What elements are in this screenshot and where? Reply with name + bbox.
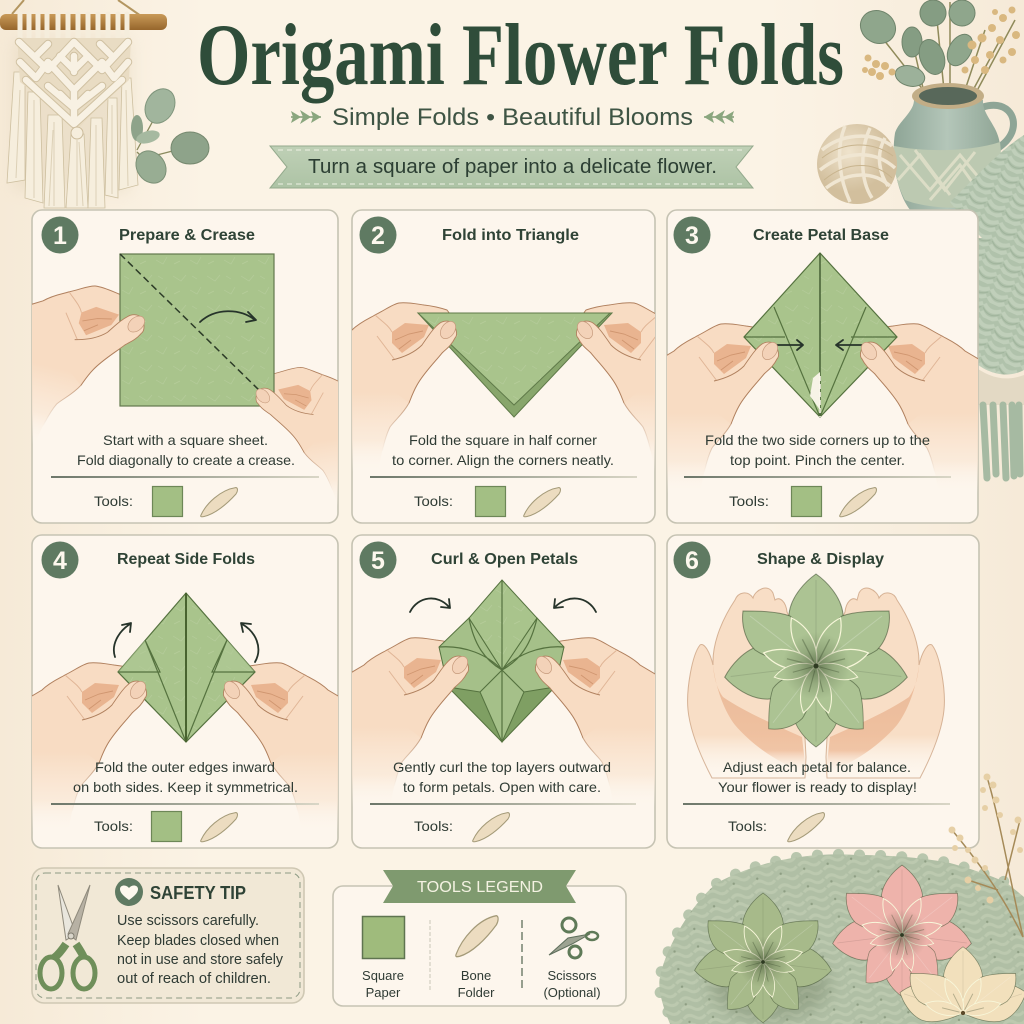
legend: bone folder: Bone <box>461 968 491 983</box>
description <box>705 432 930 468</box>
step number 6: 6 <box>685 547 699 575</box>
legend: square paper: Square <box>362 968 404 983</box>
illustration: curled petals, hands and arrows <box>352 579 655 801</box>
description <box>77 432 295 468</box>
description: to form petals. Open with care. <box>403 779 601 795</box>
decoration: crochet doily <box>659 854 1024 1024</box>
panel: step 4 <box>31 534 339 849</box>
decoration: knitted scarf <box>950 135 1024 478</box>
tools row: Tools: <box>414 818 453 834</box>
heading: Shape & Display <box>757 551 884 568</box>
safety text <box>117 913 284 987</box>
tools row <box>94 812 238 842</box>
step number 1: 1 <box>53 222 67 250</box>
illustration: finished flower in cupped hands <box>688 574 944 778</box>
flower <box>721 574 911 747</box>
safety text: not in use and store safely <box>117 952 284 968</box>
panel: step 3 <box>666 209 979 524</box>
banner text: Turn a square of paper into a delicate flower. <box>308 156 717 178</box>
heading: Curl & Open Petals <box>431 551 578 568</box>
step number 2: 2 <box>371 222 385 250</box>
icon: heart badge <box>115 878 143 906</box>
decoration: macrame wall hanging <box>0 0 167 208</box>
description <box>718 759 917 795</box>
step number 6 <box>674 542 710 578</box>
step number 5: 5 <box>371 547 385 575</box>
panel: step 6 <box>667 535 979 848</box>
illustration: side folds, hands and arrows <box>32 592 338 826</box>
description: Fold the two side corners up to the <box>705 432 930 448</box>
banner: intro ribbon <box>270 146 753 188</box>
illustration: square with diagonal crease and hands <box>32 253 338 502</box>
tools row <box>414 812 510 842</box>
illustration: triangle and hands <box>352 302 655 466</box>
tools row <box>94 486 238 517</box>
legend: scissors <box>543 918 601 1000</box>
left cupped hand <box>688 588 806 778</box>
icon: scissors <box>40 885 95 989</box>
description: Adjust each petal for balance. <box>723 759 911 775</box>
pink flower <box>830 865 974 997</box>
subtitle <box>291 104 734 131</box>
safety text: Use scissors carefully. <box>117 913 259 929</box>
heading: Fold into Triangle <box>442 227 579 244</box>
tools row: Tools: <box>414 493 453 509</box>
heading: Prepare & Crease <box>119 227 255 244</box>
green flower <box>692 893 834 1023</box>
step number 5 <box>360 542 396 578</box>
heading: Create Petal Base <box>753 227 889 244</box>
step number 4 <box>42 542 78 578</box>
decoration: yarn ball <box>817 124 897 204</box>
legend: bone folder: Folder <box>458 985 495 1000</box>
description <box>73 759 298 795</box>
description: Start with a square sheet. <box>103 432 268 448</box>
tools row: Tools: <box>729 493 769 509</box>
subtitle text: Simple Folds • Beautiful Blooms <box>332 104 693 131</box>
decoration: vase with plants <box>854 0 1020 212</box>
description: on both sides. Keep it symmetrical. <box>73 779 298 795</box>
tools row: Tools: <box>94 493 133 509</box>
description: top point. Pinch the center. <box>730 452 905 468</box>
legend: square paper <box>362 916 404 1000</box>
decoration: paper flowers <box>692 865 1024 1024</box>
description: Your flower is ready to display! <box>718 779 917 795</box>
heading: Repeat Side Folds <box>117 551 255 568</box>
legend: scissors: Scissors <box>547 968 597 983</box>
tools row <box>414 486 560 517</box>
panel: step 2 <box>351 209 656 524</box>
panel: safety tip <box>32 868 304 1003</box>
illustration: petal base kite and hands <box>667 252 978 487</box>
legend: bone folder <box>456 916 498 1000</box>
tools row <box>729 486 876 517</box>
tools row: Tools: <box>94 818 133 834</box>
description: Fold the outer edges inward <box>95 759 275 775</box>
icon: right sprig <box>704 110 734 124</box>
safety text: out of reach of children. <box>117 971 271 987</box>
title: Origami Flower Folds <box>197 7 844 104</box>
panel: tools legend <box>333 870 626 1006</box>
safety text: Keep blades closed when <box>117 933 279 949</box>
safety heading: SAFETY TIP <box>150 883 246 903</box>
right cupped hand <box>826 588 944 778</box>
legend ribbon: TOOLS LEGEND <box>417 879 543 896</box>
step number 3: 3 <box>685 222 699 250</box>
step number 4: 4 <box>53 547 67 575</box>
decoration: eucalyptus sprig <box>130 84 209 189</box>
panel: step 1 <box>31 209 339 524</box>
description: Gently curl the top layers outward <box>393 759 611 775</box>
description: to corner. Align the corners neatly. <box>392 452 614 468</box>
description: Fold the square in half corner <box>409 432 597 448</box>
cream flower <box>894 947 1024 1024</box>
description <box>392 432 614 468</box>
panel: step 5 <box>351 534 656 849</box>
legend ribbon <box>383 870 576 903</box>
legend: scissors: (Optional) <box>543 985 601 1000</box>
description: Fold diagonally to create a crease. <box>77 452 295 468</box>
description <box>393 759 611 795</box>
decoration: dried branch <box>948 774 1023 937</box>
tools row: Tools: <box>728 818 767 834</box>
step number 3 <box>674 216 710 254</box>
tools row <box>728 812 824 842</box>
step number 2 <box>360 216 396 254</box>
icon: left sprig <box>291 110 321 124</box>
step number 1 <box>42 216 78 254</box>
legend: square paper: Paper <box>366 985 401 1000</box>
